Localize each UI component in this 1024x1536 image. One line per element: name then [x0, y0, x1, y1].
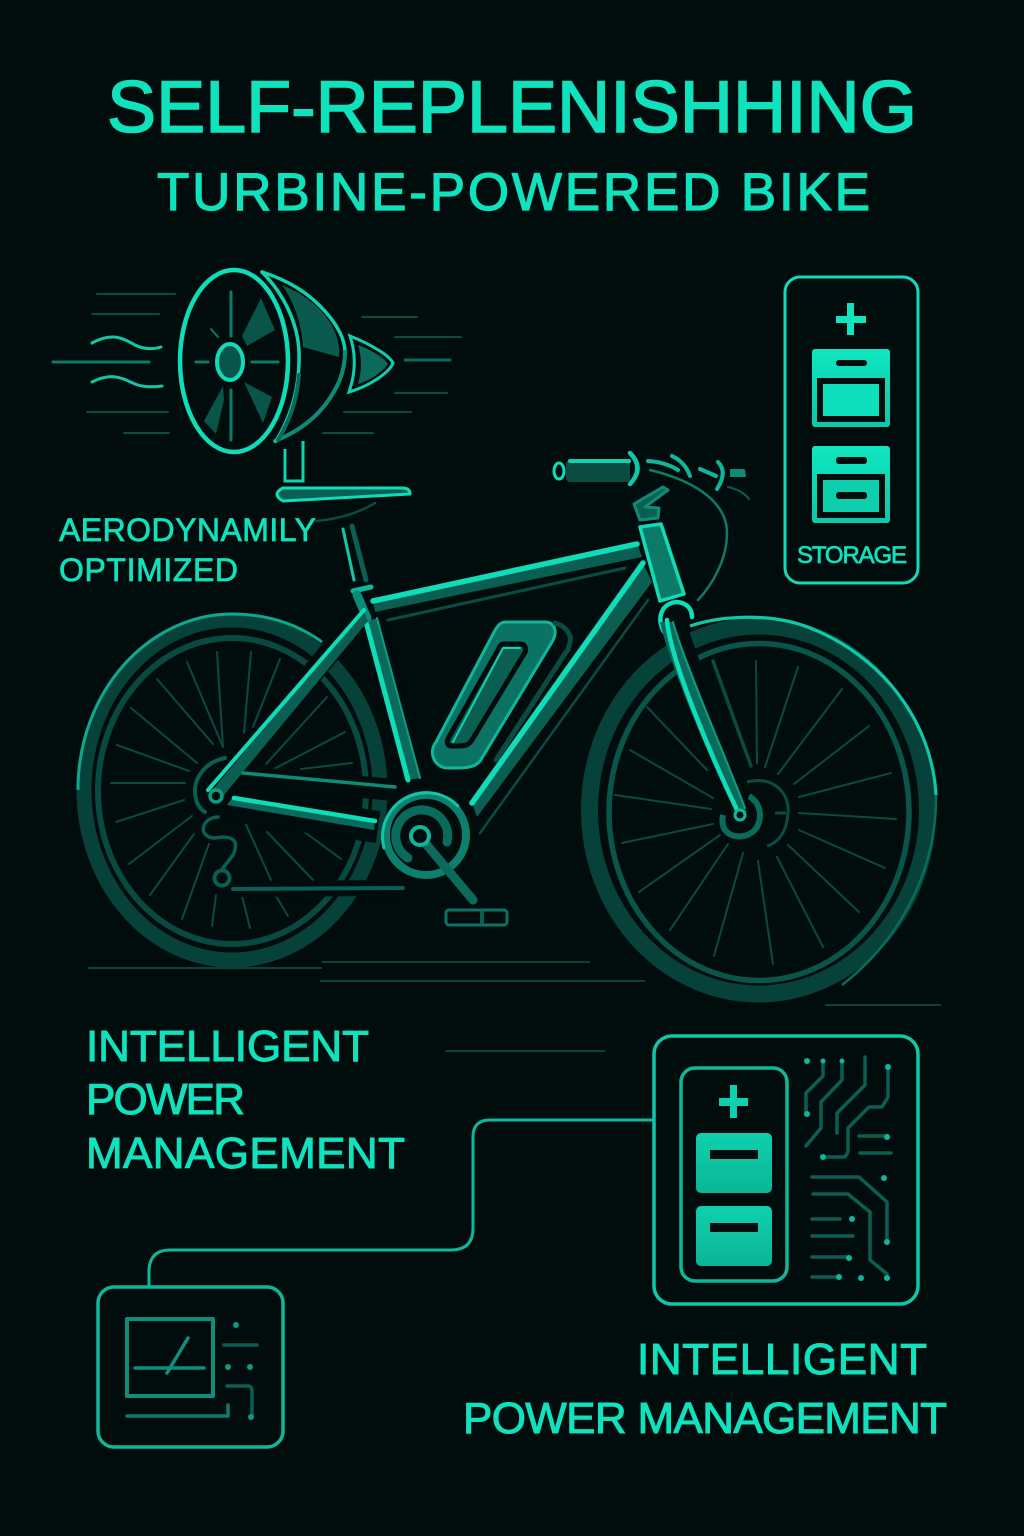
- rotor blades: [204, 298, 275, 434]
- rear dropout and derailleur: [195, 758, 225, 812]
- head tube: [640, 524, 684, 601]
- storage label: STORAGE: [797, 542, 907, 569]
- title: SELF-REPLENISHHING: [107, 67, 917, 148]
- icon: turbine: [53, 270, 461, 481]
- label: intelligent power management right: INTELLIGENT: [637, 1335, 927, 1384]
- wind lines: [53, 294, 461, 433]
- circuit traces: [806, 1057, 891, 1277]
- storage cell 2: [812, 446, 890, 523]
- saddle and seat post: [277, 488, 410, 501]
- rear spokes: [111, 652, 352, 928]
- connector wire: [149, 1120, 654, 1287]
- circuit nodes: [804, 1058, 891, 1281]
- front spokes: [615, 661, 896, 964]
- nacelle: [262, 272, 345, 441]
- icon: rear wheel: [78, 614, 380, 960]
- screen: [127, 1319, 213, 1396]
- crank arm and pedal: [421, 838, 473, 900]
- icon: bicycle frame: [195, 453, 749, 925]
- mount: [285, 441, 303, 481]
- label: aerodynamic: AERODYNAMILY: [59, 512, 316, 548]
- hub: [217, 344, 243, 380]
- label: intelligent power management right: [463, 1335, 947, 1443]
- fork: [660, 602, 692, 632]
- icon: plus: [836, 303, 866, 335]
- road lines: [88, 962, 941, 1051]
- icon: front wheel: [590, 617, 936, 994]
- rotor ring: [180, 270, 288, 452]
- label: intelligent power management right: POWER MANAGEMENT: [463, 1394, 947, 1443]
- seat tube: [365, 618, 421, 780]
- nose cone: [349, 336, 393, 392]
- battery pack: [681, 1068, 787, 1281]
- storage cell 1: [812, 349, 890, 427]
- title: [107, 67, 917, 222]
- controls: [127, 1405, 228, 1416]
- battery: [432, 622, 555, 768]
- label: aerodynamic: [59, 512, 316, 588]
- brake cable: [650, 470, 727, 600]
- panel: storage: [785, 277, 918, 583]
- label: intelligent power management left: INTELLIGENT: [86, 1022, 369, 1071]
- panel: monitor: [98, 1287, 283, 1447]
- label: intelligent power management left: POWER: [86, 1075, 245, 1124]
- subtitle: TURBINE-POWERED BIKE: [157, 163, 870, 222]
- top tube: [373, 543, 642, 612]
- label: intelligent power management left: MANAGEMENT: [86, 1129, 405, 1178]
- seat stay: [209, 610, 368, 795]
- label: aerodynamic: OPTIMIZED: [59, 552, 238, 588]
- chainring: [386, 795, 466, 875]
- handlebar: [566, 460, 630, 482]
- down tube: [472, 563, 652, 817]
- panel: power management: [654, 1036, 918, 1304]
- label: intelligent power management left: [86, 1022, 405, 1178]
- stem: [634, 487, 668, 520]
- frame halo: [212, 570, 742, 889]
- front hub: [747, 781, 788, 846]
- chain stay: [227, 797, 375, 830]
